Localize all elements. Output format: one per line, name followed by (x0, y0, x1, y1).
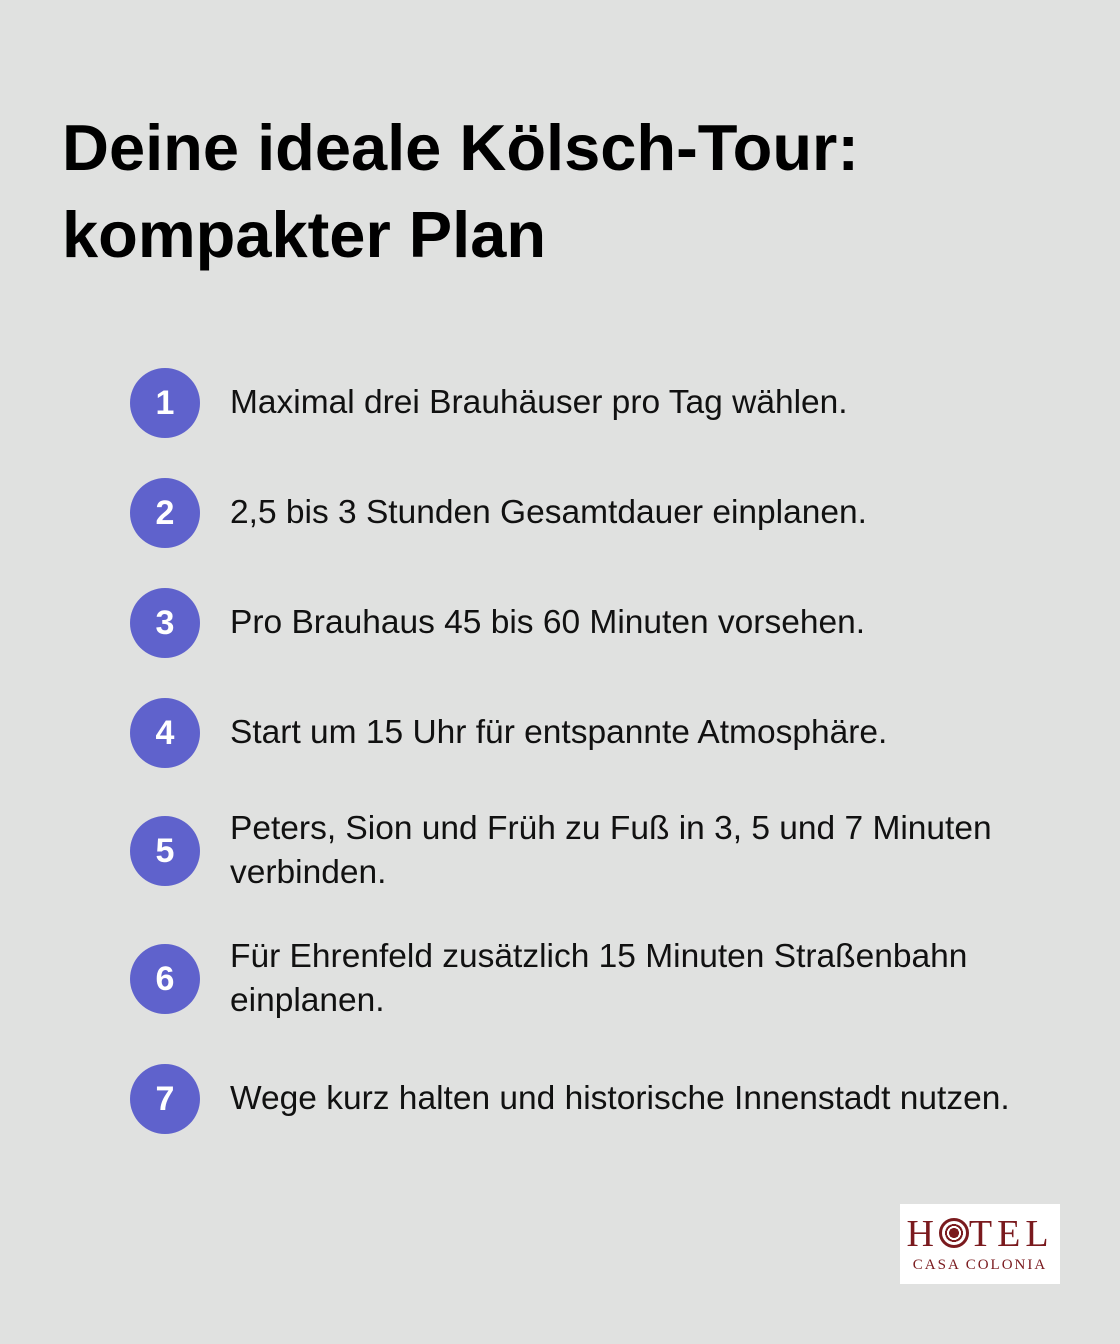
item 4: 4 (156, 714, 174, 752)
item 6: 6 (156, 960, 174, 998)
item 1: 1 (156, 384, 174, 422)
item 4 (130, 698, 887, 768)
title (62, 111, 859, 271)
item 7 (130, 1064, 1010, 1134)
logo: H TEL (906, 1213, 1054, 1255)
logo (900, 1204, 1060, 1284)
item 1: Maximal drei Brauhäuser pro Tag wählen. (230, 384, 848, 421)
item 2: 2 (156, 494, 174, 532)
item 1 (130, 368, 848, 438)
item 3: 3 (156, 604, 174, 642)
item 4: Start um 15 Uhr für entspannte Atmosphäre. (230, 714, 887, 751)
logo: CASA COLONIA (913, 1257, 1047, 1273)
title: kompakter Plan (62, 198, 546, 271)
item 3 (130, 588, 865, 658)
title: Deine ideale Kölsch-Tour: (62, 111, 859, 184)
item 2 (130, 478, 867, 548)
item 7: Wege kurz halten und historische Innenstadt nutzen. (230, 1080, 1010, 1117)
item 6: Für Ehrenfeld zusätzlich 15 Minuten Straßenbahn einplanen. (230, 938, 967, 1019)
item 3: Pro Brauhaus 45 bis 60 Minuten vorsehen. (230, 604, 865, 641)
item 5: Peters, Sion und Früh zu Fuß in 3, 5 und 7 Minuten verbinden. (230, 810, 992, 891)
item 2: 2,5 bis 3 Stunden Gesamtdauer einplanen. (230, 494, 867, 531)
item 5: 5 (156, 832, 174, 870)
item 7: 7 (156, 1080, 174, 1118)
